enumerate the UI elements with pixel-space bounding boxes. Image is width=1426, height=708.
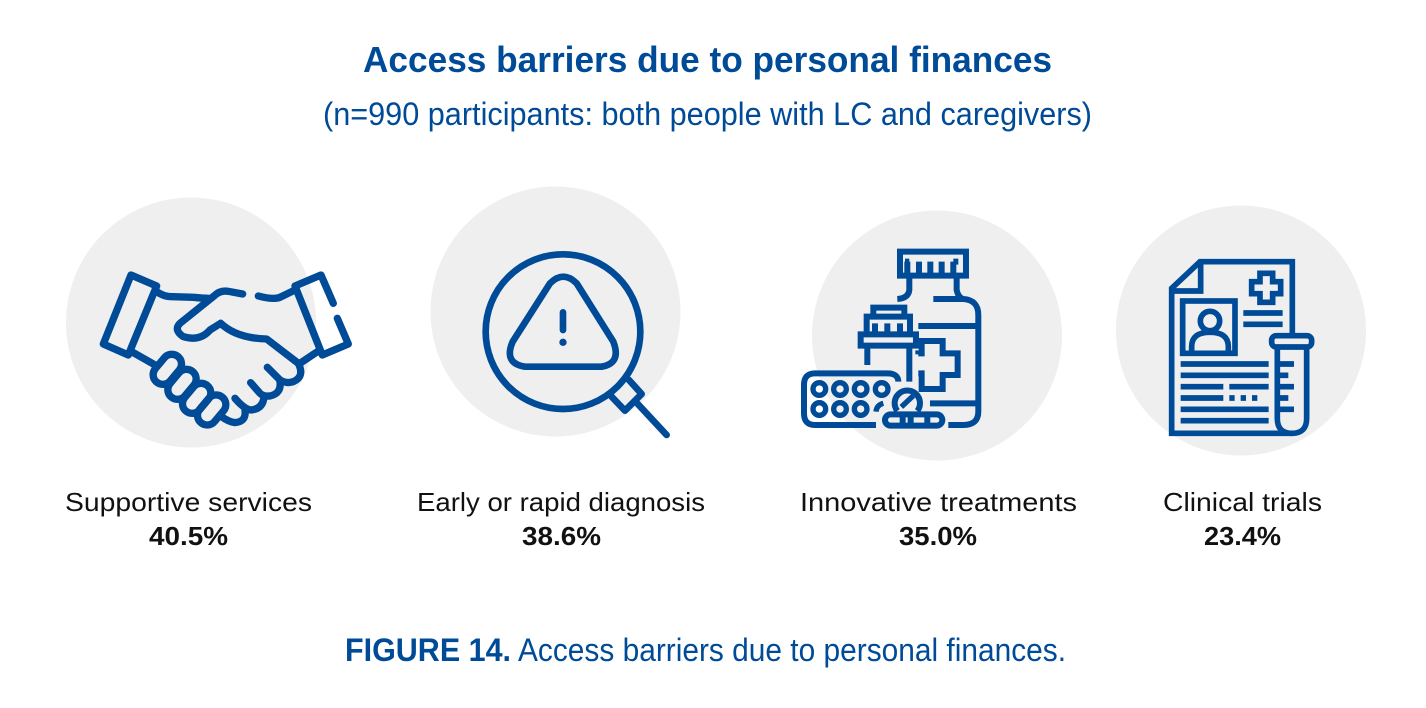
panel: supportive services xyxy=(65,198,348,551)
panel: early or rapid diagnosis xyxy=(417,186,705,551)
icon background circle xyxy=(812,210,1062,460)
panel: clinical trials xyxy=(1116,206,1366,551)
caption label: FIGURE 14. xyxy=(345,632,511,668)
caption text: Access barriers due to personal finances. xyxy=(518,632,1066,668)
value: 35.0%: 35.0% xyxy=(899,521,977,551)
label: clinical trials: Clinical trials xyxy=(1163,487,1322,517)
icon: magnifier with warning xyxy=(486,254,667,435)
title: Access barriers due to personal finances xyxy=(363,39,1052,80)
icon background circle xyxy=(66,198,316,448)
subtitle: (n=990 participants: both people with LC and caregivers) xyxy=(323,96,1092,132)
icon: handshake xyxy=(103,275,348,429)
label: supportive services: Supportive services xyxy=(65,487,312,517)
icon: medicine bottles and pills xyxy=(804,252,978,426)
icon: medical record and test tube xyxy=(1172,262,1312,433)
label: innovative treatments: Innovative treatments xyxy=(800,487,1077,517)
panel: innovative treatments xyxy=(800,210,1077,551)
label: early or rapid diagnosis: Early or rapid diagnosis xyxy=(417,487,705,517)
figure caption xyxy=(345,632,1066,668)
icon background circle xyxy=(1116,206,1366,456)
value: 38.6%: 38.6% xyxy=(522,521,601,551)
value: 40.5%: 40.5% xyxy=(149,521,228,551)
icon background circle xyxy=(430,186,680,436)
value: 23.4%: 23.4% xyxy=(1204,521,1281,551)
